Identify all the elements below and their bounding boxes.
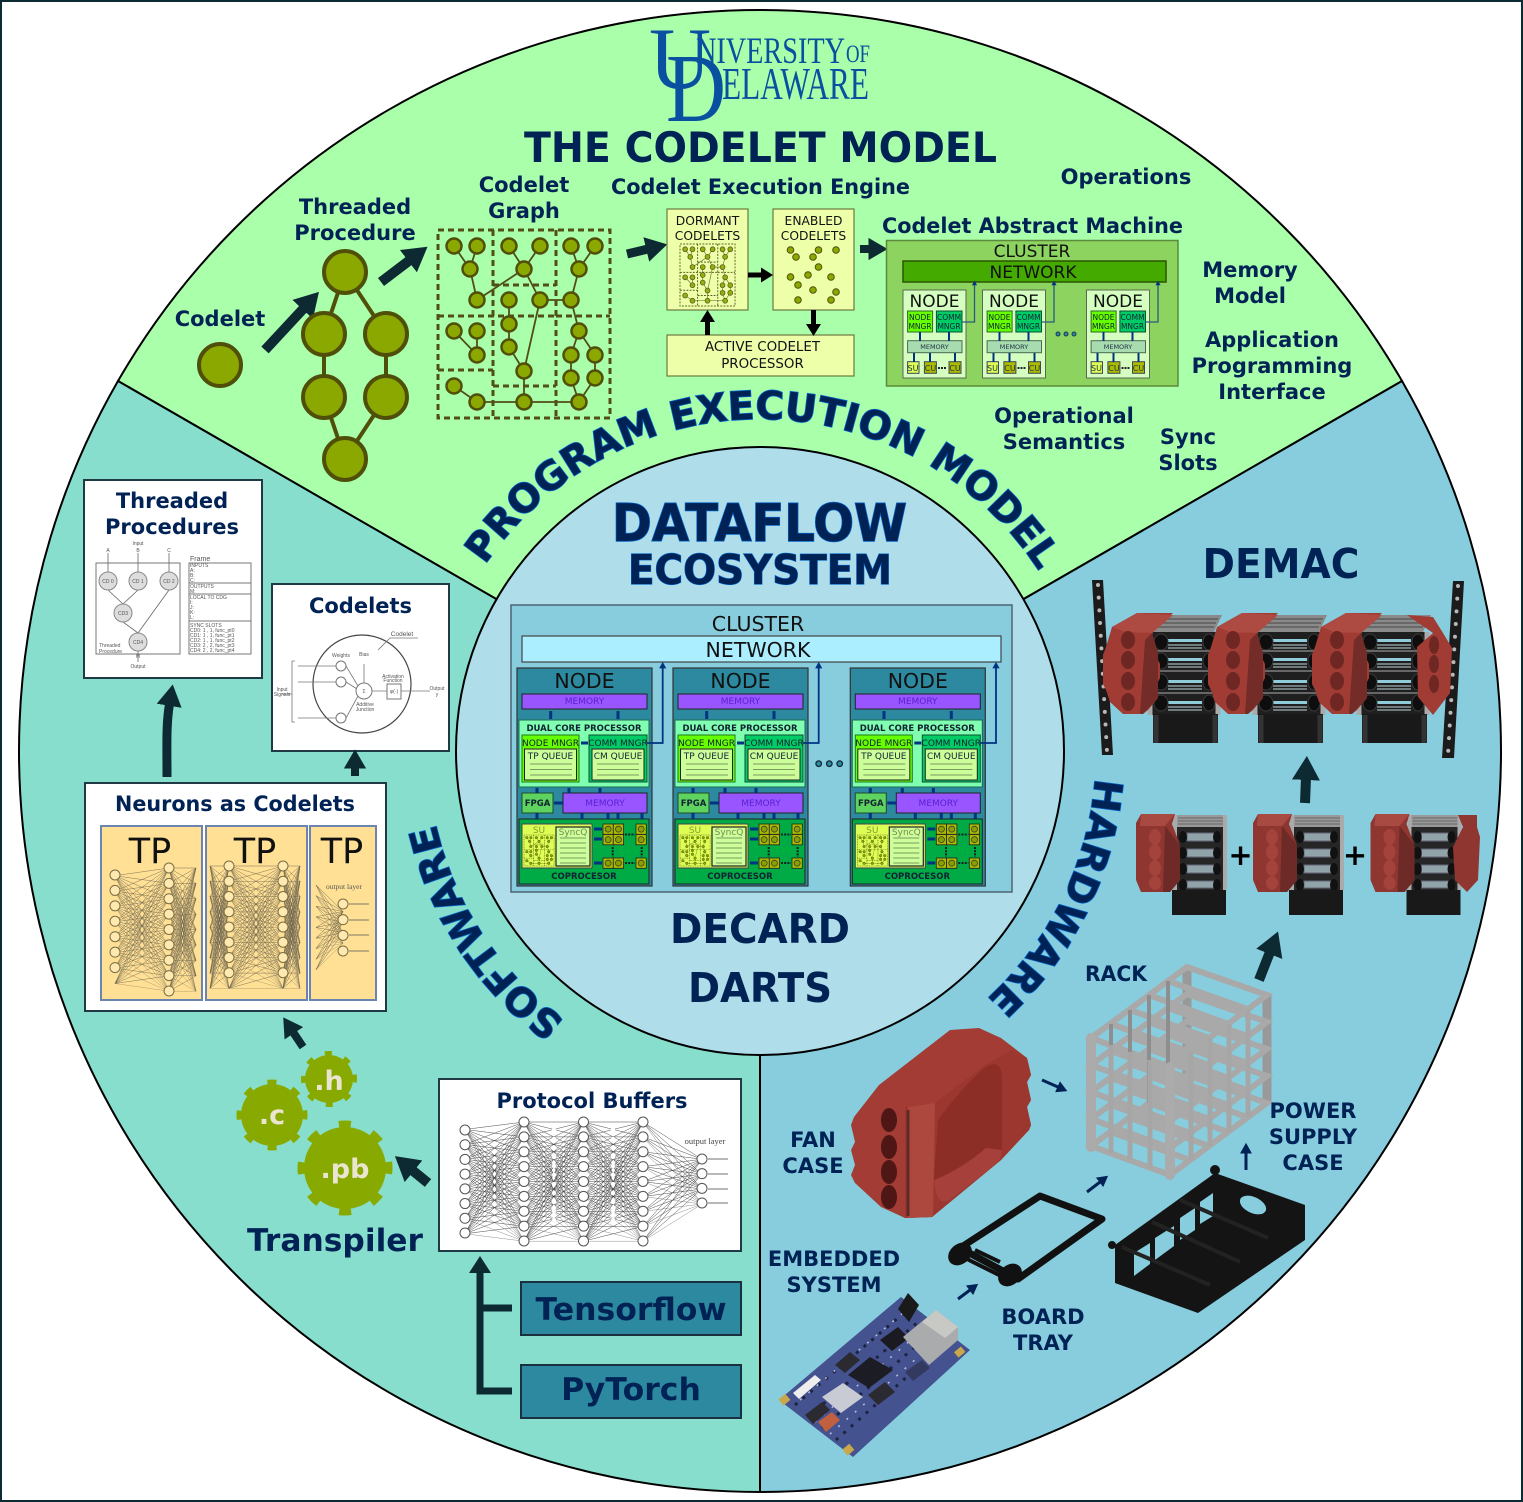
panel: threaded procedures: CD3 — [118, 611, 128, 617]
panel: threaded procedures: CD4: 2 , 2, func_pt4 — [190, 648, 235, 654]
panel: threaded procedures: Input — [132, 541, 144, 547]
cluster node 1: MEMORY — [585, 799, 625, 809]
panel: cluster: NETWORK — [706, 638, 811, 662]
panel: codelets: Bias — [359, 652, 369, 658]
panel: enabled codelets: CODELETS — [781, 229, 846, 243]
illustration: three rack units: + — [1343, 838, 1367, 872]
panel: threaded procedures: B: — [190, 573, 195, 579]
cluster node 1: TP QUEUE — [527, 752, 574, 762]
panel: active codelet processor: PROCESSOR — [721, 357, 804, 372]
panel: codelets: Codelets — [309, 594, 412, 618]
panel: threaded procedures: SYNC SLOTS — [190, 623, 222, 629]
label: EMBEDDED SYSTEM: SYSTEM — [786, 1273, 882, 1297]
panel: codelet abstract machine: NODE — [910, 292, 959, 312]
panel: codelet abstract machine: MNGR — [1092, 322, 1115, 331]
icon: gear .c — [236, 1079, 308, 1151]
panel: threaded procedures — [84, 480, 262, 678]
cluster node 2: MEMORY — [721, 697, 761, 707]
panel: codelet abstract machine: MNGR — [988, 322, 1011, 331]
label: BOARD TRAY: BOARD — [1001, 1305, 1085, 1329]
label: RACK: RACK — [1085, 962, 1148, 986]
cluster node 1: COMM MNGR — [588, 739, 648, 749]
panel: threaded procedures: CD2: 1 , 1, func_pt2 — [190, 638, 235, 644]
diagram: codelet graph — [438, 230, 610, 418]
panel: dormant codelets: DORMANT — [676, 214, 740, 228]
panel: threaded procedures: M: — [190, 589, 196, 595]
label: FAN CASE: CASE — [782, 1154, 844, 1178]
panel: threaded procedures: CD4 — [133, 640, 143, 646]
panel: neurons as codelets — [85, 783, 386, 1011]
panel: codelet abstract machine: CLUSTER — [994, 242, 1071, 262]
panel: codelet abstract machine: CU — [925, 364, 936, 373]
logo: University of Delaware: D — [666, 35, 726, 143]
panel: threaded procedures: CD3: 2 , 2, func_pt3 — [190, 643, 235, 649]
panel: codelet abstract machine: NODE — [988, 313, 1011, 322]
cluster node 2: COMM MNGR — [744, 739, 804, 749]
panel: codelet abstract machine: MEMORY — [1000, 343, 1028, 351]
centre circle background — [456, 447, 1064, 1055]
cluster node 3: CM QUEUE — [927, 752, 976, 762]
arrow: neurons to codelets — [351, 767, 359, 776]
cluster node 2: NODE MNGR — [678, 739, 735, 749]
cluster node 2: TP QUEUE — [683, 752, 730, 762]
centre heading: Dataflow Ecosystem — [612, 494, 907, 594]
panel: dormant codelets: CODELETS — [675, 229, 740, 243]
panel: cluster — [511, 605, 1012, 892]
cluster node 3: COMM MNGR — [922, 739, 981, 749]
panel: codelet abstract machine: SU — [987, 364, 998, 373]
heading: DEMAC: DEMAC — [1202, 540, 1360, 588]
centre heading: Dataflow Ecosystem: DATAFLOW — [612, 494, 907, 554]
label: BOARD TRAY: TRAY — [1013, 1331, 1074, 1355]
panel: codelet abstract machine: SU — [1091, 364, 1102, 373]
panel: codelet abstract machine: NODE — [1093, 292, 1143, 312]
label: POWER SUPPLY CASE: SUPPLY — [1269, 1125, 1358, 1149]
arrow: codelet graph to engine — [627, 249, 648, 254]
label: Codelet Graph: Codelet — [479, 173, 569, 197]
logo: University of Delaware: NIVERSITY — [696, 31, 845, 72]
logo: University of Delaware: U — [649, 11, 711, 108]
panel: codelets: Codelet — [391, 631, 413, 638]
illustration: DEMAC rack assembly — [1092, 580, 1464, 758]
panel: threaded procedures: LOCAL TO CDG — [190, 595, 227, 601]
cluster node 3: CU's — [953, 846, 971, 855]
panel: threaded procedures: CD 1 — [132, 579, 144, 585]
cluster node 3: SU — [866, 826, 878, 836]
label: Transpiler: Transpiler — [247, 1223, 424, 1259]
panel: threaded procedures: I: — [190, 600, 193, 606]
arrow: threaded procedure to codelet graph — [381, 260, 410, 282]
cluster node 1: CM QUEUE — [594, 752, 643, 762]
label: DECARD: DECARD — [670, 905, 850, 953]
panel: codelets: φ(·) — [390, 689, 398, 695]
label: Codelet: Codelet — [175, 307, 265, 331]
panel: Tensorflow — [521, 1282, 741, 1335]
label: Sync Slots: Slots — [1158, 451, 1218, 475]
panel: threaded procedures: J: — [190, 605, 194, 611]
panel: threaded procedures: Threaded — [116, 489, 228, 513]
panel: codelet abstract machine: CU — [1133, 364, 1144, 373]
panel: threaded procedures: Frame — [190, 556, 210, 563]
illustration: three rack units — [1136, 814, 1480, 915]
cluster node 2 — [673, 668, 819, 886]
arrow: neurons to threaded procedures — [167, 704, 170, 777]
cluster node 1: DUAL CORE PROCESSOR — [526, 724, 642, 734]
arrow: power supply case to rack — [1244, 1153, 1248, 1170]
cluster node 1: NODE MNGR — [522, 739, 579, 749]
panel: codelet abstract machine: NODE — [989, 292, 1039, 312]
label: FAN CASE: FAN — [790, 1128, 836, 1152]
cluster node 1 — [517, 668, 663, 886]
curved heading: Program Execution Model: PROGRAM EXECUTION MODEL — [463, 390, 1056, 571]
panel: threaded procedures: K: — [190, 610, 195, 616]
panel: dormant codelets — [667, 209, 748, 310]
panel: codelet abstract machine — [886, 240, 1178, 386]
panel: codelets: Activation — [382, 674, 404, 680]
label: Codelet Execution Engine: Codelet Execution Engine — [611, 175, 910, 199]
cluster node 3: DUAL CORE PROCESSOR — [860, 724, 975, 734]
panel: threaded procedures: A: — [190, 568, 195, 574]
panel: threaded procedures: B — [136, 548, 140, 554]
panel: threaded procedures: Output — [130, 664, 146, 670]
cluster node 3: COPROCESOR — [885, 872, 950, 882]
label: Threaded Procedure: Procedure — [294, 221, 416, 245]
panel: codelet abstract machine: CU — [1004, 364, 1016, 373]
cluster node 2: FPGA — [681, 799, 707, 809]
arrow: embedded system to board tray — [958, 1290, 970, 1299]
panel: codelets — [272, 584, 449, 751]
panel: threaded procedures: Threaded — [99, 643, 121, 649]
panel: Tensorflow: Tensorflow — [535, 1292, 727, 1328]
panel: neurons as codelets: TP — [233, 832, 276, 872]
panel: active codelet processor: ACTIVE CODELET — [705, 340, 821, 355]
cluster node 1: FPGA — [525, 799, 551, 809]
panel: codelet abstract machine: COMM — [1016, 313, 1041, 322]
panel: codelets: Σ — [362, 689, 366, 695]
arrow: engine to abstract machine — [860, 245, 870, 253]
panel: threaded procedures: A — [106, 548, 110, 554]
label: Memory Model: Memory — [1202, 258, 1298, 282]
label: Threaded Procedure: Threaded — [299, 195, 411, 219]
label: Sync Slots: Sync — [1160, 425, 1216, 449]
panel: threaded procedures: INPUTS — [190, 563, 209, 569]
icon: gear .pb — [296, 1119, 394, 1217]
panel: codelets: Additive — [356, 702, 374, 708]
panel: threaded procedures: CD 0 — [102, 579, 114, 585]
label: Application Programming Interface: Programming — [1192, 354, 1352, 378]
title: The Codelet Model: THE CODELET MODEL — [524, 123, 997, 172]
panel: codelet abstract machine: NODE — [909, 313, 931, 322]
panel: codelet abstract machine: MNGR — [937, 322, 961, 331]
panel: enabled codelets — [773, 209, 854, 310]
panel: codelets: y — [436, 692, 439, 698]
cluster node 2: MEMORY — [741, 799, 781, 809]
illustration: power supply case — [1108, 1165, 1305, 1313]
panel: threaded procedures: OUTPUTS — [190, 584, 215, 590]
cluster node 1: NODE — [554, 669, 615, 693]
illustration: three rack units: + — [1228, 838, 1253, 872]
panel: PyTorch — [521, 1365, 741, 1418]
panel: codelet abstract machine: MNGR — [908, 322, 932, 331]
sector: software background — [19, 381, 760, 1492]
panel: cluster: CLUSTER — [712, 612, 804, 636]
panel: codelet abstract machine: CU — [949, 364, 961, 373]
arrow: frameworks to protocol buffers — [469, 1256, 512, 1391]
arrow: units to assembly — [1305, 778, 1306, 803]
curved heading: Software: SOFTWARE — [408, 826, 562, 1038]
arrow: fan case to rack — [1042, 1080, 1058, 1087]
panel: codelets: Function — [383, 678, 403, 684]
diagram: threaded procedure graph — [303, 251, 407, 480]
panel: threaded procedures: CD 2 — [163, 579, 175, 585]
panel: codelets: Junction — [356, 707, 375, 713]
cluster node 3: FPGA — [858, 799, 884, 809]
cluster node 2: SyncQ — [715, 828, 743, 838]
cluster node 1: MEMORY — [565, 697, 605, 707]
panel: protocol buffers: Protocol Buffers — [496, 1089, 688, 1113]
cluster node 3: SyncQ — [892, 828, 921, 838]
panel: neurons as codelets: output layer — [326, 882, 363, 891]
panel: threaded procedures: Procedures — [105, 515, 239, 539]
cluster node 2: SU — [689, 826, 701, 836]
icon: gear .c: .c — [259, 1100, 285, 1131]
panel: codelet abstract machine: MEMORY — [1104, 343, 1132, 351]
panel: codelet abstract machine: MEMORY — [920, 343, 949, 351]
cluster node 2: DUAL CORE PROCESSOR — [682, 724, 798, 734]
arrows: engine flow — [708, 275, 814, 335]
ellipsis between nodes — [816, 761, 842, 766]
panel: PyTorch: PyTorch — [561, 1372, 701, 1408]
cluster node 1: CU's — [620, 846, 637, 855]
panel: threaded procedures: Procedure — [99, 649, 122, 655]
cluster node 3: TP QUEUE — [860, 752, 907, 762]
panel: codelets: Weights — [332, 653, 350, 659]
panel: codelet abstract machine: CU — [1029, 364, 1040, 373]
panel: threaded procedures: CD0: 1 , 1, func_pt0 — [190, 628, 235, 634]
illustration: rack frame — [1091, 967, 1267, 1175]
centre heading: Dataflow Ecosystem: ECOSYSTEM — [628, 546, 892, 594]
panel: threaded procedures: C: — [190, 578, 195, 584]
panel: codelet abstract machine: CU — [1108, 364, 1120, 373]
icon: gear .h — [301, 1051, 357, 1107]
panel: neurons as codelets: Neurons as Codelets — [115, 792, 355, 816]
sector: hardware background — [760, 381, 1501, 1492]
panel: protocol buffers — [439, 1079, 741, 1251]
curved heading: Hardware: HARDWARE — [988, 780, 1124, 1018]
label: DARTS: DARTS — [688, 964, 832, 1012]
panel: neurons as codelets: TP — [128, 832, 171, 872]
cluster node 2: NODE — [710, 669, 771, 693]
label: Operational Semantics: Operational — [994, 404, 1134, 428]
cluster node 3: NODE — [888, 669, 948, 693]
logo: University of Delaware: OF — [846, 41, 870, 68]
panel: codelet abstract machine: NETWORK — [990, 263, 1077, 283]
panel: threaded procedures: L: — [190, 615, 194, 621]
panel: codelet abstract machine: COMM — [1120, 313, 1145, 322]
panel: threaded procedures: M — [136, 654, 140, 660]
panel: enabled codelets: ENABLED — [785, 214, 842, 228]
panel: codelets: Input — [276, 687, 288, 693]
cluster node 1: COPROCESOR — [551, 872, 617, 882]
arrow: board tray to rack — [1087, 1182, 1100, 1192]
illustration: fan case — [851, 1028, 1031, 1218]
label: Application Programming Interface: Interface — [1218, 380, 1326, 404]
cluster node 2: COPROCESOR — [707, 872, 773, 882]
label: Codelet Graph: Graph — [488, 199, 560, 223]
cluster node 1: SU — [533, 826, 545, 836]
label: POWER SUPPLY CASE: CASE — [1282, 1151, 1344, 1175]
arrow: gears to neurons — [293, 1032, 303, 1047]
panel: codelet abstract machine: MNGR — [1121, 322, 1144, 331]
logo: University of Delaware: ELAWARE — [722, 58, 869, 109]
panel: threaded procedures: C — [167, 548, 171, 554]
logo: University of Delaware — [649, 11, 870, 143]
panel: codelet abstract machine: SU — [908, 364, 919, 373]
label: POWER SUPPLY CASE: POWER — [1270, 1099, 1356, 1123]
cluster node 3 — [850, 668, 996, 886]
label: Operational Semantics: Semantics — [1003, 430, 1125, 454]
panel: codelet abstract machine: COMM — [937, 313, 961, 322]
icon: single codelet — [199, 344, 241, 386]
cluster node 3: MEMORY — [919, 799, 959, 809]
panel: active codelet processor — [667, 335, 854, 376]
panel: neurons as codelets: TP — [320, 832, 363, 872]
arrow: codelet to threaded procedure — [265, 308, 304, 350]
label: EMBEDDED SYSTEM: EMBEDDED — [768, 1247, 900, 1271]
label: Operations: Operations — [1061, 165, 1191, 189]
arrow: protocol buffers to transpiler — [412, 1170, 428, 1183]
illustration: board tray — [944, 1196, 1102, 1291]
cluster node 1: SyncQ — [559, 828, 587, 838]
arrow: rack to units — [1259, 952, 1270, 980]
label: Memory Model: Model — [1214, 284, 1286, 308]
icon: gear .h: .h — [314, 1066, 344, 1097]
panel: codelets: Output — [429, 686, 445, 692]
panel: codelet abstract machine: NODE — [1092, 313, 1115, 322]
label: Application Programming Interface: Application — [1205, 328, 1339, 352]
panel: codelets: Signals — [274, 692, 291, 698]
panel: protocol buffers: output layer — [685, 1136, 726, 1146]
panel: threaded procedures: CD1: 1 , 1, func_pt1 — [190, 633, 235, 639]
panel: codelet abstract machine: MNGR — [1017, 322, 1040, 331]
cluster node 2: CM QUEUE — [750, 752, 799, 762]
cluster node 3: MEMORY — [898, 697, 938, 707]
label: Codelet Abstract Machine: Codelet Abstract Machine — [882, 214, 1183, 238]
icon: gear .pb: .pb — [321, 1154, 369, 1185]
cluster node 3: NODE MNGR — [855, 739, 912, 749]
sector: program execution model background — [118, 10, 1402, 751]
cluster node 2: CU's — [776, 846, 793, 855]
illustration: embedded system board — [778, 1293, 970, 1457]
